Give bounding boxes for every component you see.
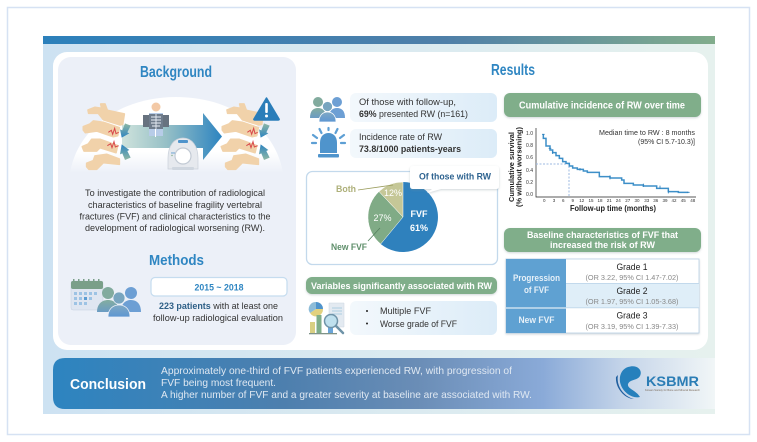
text block: conclusion: Approximately one-third of FVF patients experienced RW, with progression of xyxy=(161,365,512,377)
callout: study period xyxy=(151,278,287,296)
median annotation: Median time to RW : 8 months xyxy=(599,130,695,137)
median guide xyxy=(536,164,569,197)
icon: people xyxy=(310,97,345,122)
panel: variables list xyxy=(350,301,497,335)
background panel xyxy=(43,44,715,414)
row: grade 3: (OR 3.19, 95% CI 1.39-7.33) xyxy=(586,322,679,331)
x tick labels: 18 xyxy=(597,198,603,203)
icon: spine right xyxy=(221,104,270,169)
x tick labels: 33 xyxy=(644,198,650,203)
row labels: of FVF xyxy=(524,285,549,295)
icon: spine left xyxy=(82,104,131,169)
x tick labels: 3 xyxy=(553,198,556,203)
icon: x-ray xyxy=(143,102,169,137)
heading: background: Background xyxy=(140,64,212,81)
icon: analysis xyxy=(309,302,344,334)
x tick labels: 21 xyxy=(607,198,612,203)
text block: patients xyxy=(153,301,283,324)
label: new FVF: New FVF xyxy=(331,242,367,252)
panel: variables list: Worse grade of FVF xyxy=(380,319,457,330)
pie chart: FVF xyxy=(410,209,428,219)
arrow: imaging to worsening xyxy=(122,113,222,160)
row: grade 3 xyxy=(586,310,679,331)
label: new FVF xyxy=(331,228,380,252)
panel: conclusion xyxy=(53,358,715,409)
heading: baseline characteristics: Baseline characteristics of FVF that xyxy=(527,230,679,241)
heading: baseline characteristics: increased the risk of RW xyxy=(550,240,655,251)
x tick labels: 15 xyxy=(588,198,594,203)
row: grade 1 xyxy=(586,262,679,282)
x tick labels: 12 xyxy=(579,198,585,203)
x tick labels: 24 xyxy=(616,198,621,203)
survival curve xyxy=(542,134,690,193)
callout: of those with RW xyxy=(410,166,499,193)
row labels: Progression xyxy=(513,273,560,283)
heading: cumulative incidence xyxy=(504,93,701,117)
heading: variables associated: Variables significantly associated with RW xyxy=(311,281,492,292)
x tick labels: 27 xyxy=(625,198,631,203)
x axis title: Follow-up time (months) xyxy=(570,204,656,213)
x tick labels: 48 xyxy=(690,198,696,203)
axes xyxy=(536,128,696,197)
x tick labels: 45 xyxy=(681,198,686,203)
text block: background objective: fractures (FVF) and clinical characteristics to the xyxy=(80,212,270,222)
y tick labels xyxy=(526,131,533,198)
row: grade 2: Grade 2 xyxy=(616,286,648,297)
y tick labels: 0.0 xyxy=(526,192,533,198)
heading: baseline characteristics xyxy=(504,228,701,252)
row: grade 1: (OR 3.22, 95% CI 1.47-7.02) xyxy=(586,273,679,282)
pie chart: 61% xyxy=(410,223,428,233)
callout: study period: 2015 ~ 2018 xyxy=(194,282,244,292)
stat: presented RW xyxy=(310,93,497,122)
icon: patients xyxy=(97,287,141,317)
top banner xyxy=(43,36,715,44)
icon: CT scanner xyxy=(168,138,198,170)
label: both xyxy=(336,184,393,194)
pie chart: 12% xyxy=(384,188,402,198)
y axis title xyxy=(507,127,524,207)
logo: KSBMR: Korean Society for Bone and Mineral Research xyxy=(645,389,701,392)
stat: presented RW: 69% presented RW (n=161) xyxy=(359,109,468,120)
x tick labels: 39 xyxy=(662,198,668,203)
text block: conclusion: A higher number of FVF and a greater severity at baseline are associated with RW. xyxy=(161,389,532,401)
row: grade 2 xyxy=(586,286,679,306)
y tick labels: 1.0 xyxy=(526,131,533,137)
x tick labels: 9 xyxy=(571,198,574,203)
label: both: Both xyxy=(336,184,356,194)
stat: incidence rate: 73.8/1000 patients-years xyxy=(359,144,461,155)
icon: calendar xyxy=(71,279,103,310)
text block: patients: follow-up radiological evaluation xyxy=(153,313,283,324)
survival chart xyxy=(507,127,696,213)
stat: incidence rate xyxy=(312,128,497,158)
stat: incidence rate: Incidence rate of RW xyxy=(359,132,442,143)
panel: variables list: Multiple FVF xyxy=(380,306,431,317)
x tick labels: 42 xyxy=(671,198,677,203)
row labels: New FVF xyxy=(518,315,555,325)
heading: variables associated xyxy=(306,277,497,294)
x tick labels: 36 xyxy=(653,198,659,203)
heading: conclusion: Conclusion xyxy=(70,377,146,393)
row labels xyxy=(513,273,560,325)
text block: conclusion: FVF being most frequent. xyxy=(161,377,276,389)
y tick labels: 0.4 xyxy=(526,168,533,174)
row: grade 3: Grade 3 xyxy=(616,310,648,322)
illustration: spine imaging xyxy=(70,97,283,173)
row: grade 2: (OR 1.97, 95% CI 1.05-3.68) xyxy=(586,297,679,306)
pie chart xyxy=(368,182,438,252)
text block: patients: 223 patients with at least one xyxy=(159,301,278,312)
x tick labels: 30 xyxy=(634,198,640,203)
y tick labels: 0.2 xyxy=(526,180,533,186)
heading: results: Results xyxy=(491,62,535,79)
y axis title: (% without worsening) xyxy=(514,127,524,207)
logo: KSBMR: KSBMR xyxy=(646,373,699,389)
text block: background objective: To investigate the contribution of radiological xyxy=(85,188,265,199)
row: grade 1: Grade 1 xyxy=(616,262,648,273)
text block: conclusion xyxy=(161,365,532,401)
main white panel xyxy=(53,52,708,350)
y tick labels: 0.8 xyxy=(526,143,533,149)
x tick labels xyxy=(543,198,696,203)
panel: pie chart xyxy=(306,166,499,264)
stat: presented RW: Of those with follow-up, xyxy=(359,97,456,108)
text block: background objective: characteristics of baseline fragility vertebral xyxy=(88,200,262,211)
median annotation: (95% CI 5.7-10.3)] xyxy=(638,139,695,146)
y tick labels: 0.6 xyxy=(526,155,533,161)
x tick labels: 0 xyxy=(543,198,546,203)
table: risk factors xyxy=(506,259,699,333)
callout: of those with RW: Of those with RW xyxy=(419,172,491,182)
panel: background and methods xyxy=(58,57,296,345)
x tick labels: 6 xyxy=(562,198,565,203)
logo: KSBMR xyxy=(616,366,701,399)
heading: methods: Methods xyxy=(149,253,204,269)
y axis title: Cumulative survival xyxy=(507,132,516,202)
icon: warning triangle xyxy=(254,98,279,120)
median annotation xyxy=(599,130,695,146)
text block: background objective: development of radiological worsening (RW). xyxy=(85,223,265,234)
text block: background objective xyxy=(80,188,270,234)
heading: cumulative incidence: Cumulative incidence of RW over time xyxy=(519,100,685,112)
pie chart: 27% xyxy=(373,213,392,223)
icon: alarm xyxy=(312,128,345,158)
